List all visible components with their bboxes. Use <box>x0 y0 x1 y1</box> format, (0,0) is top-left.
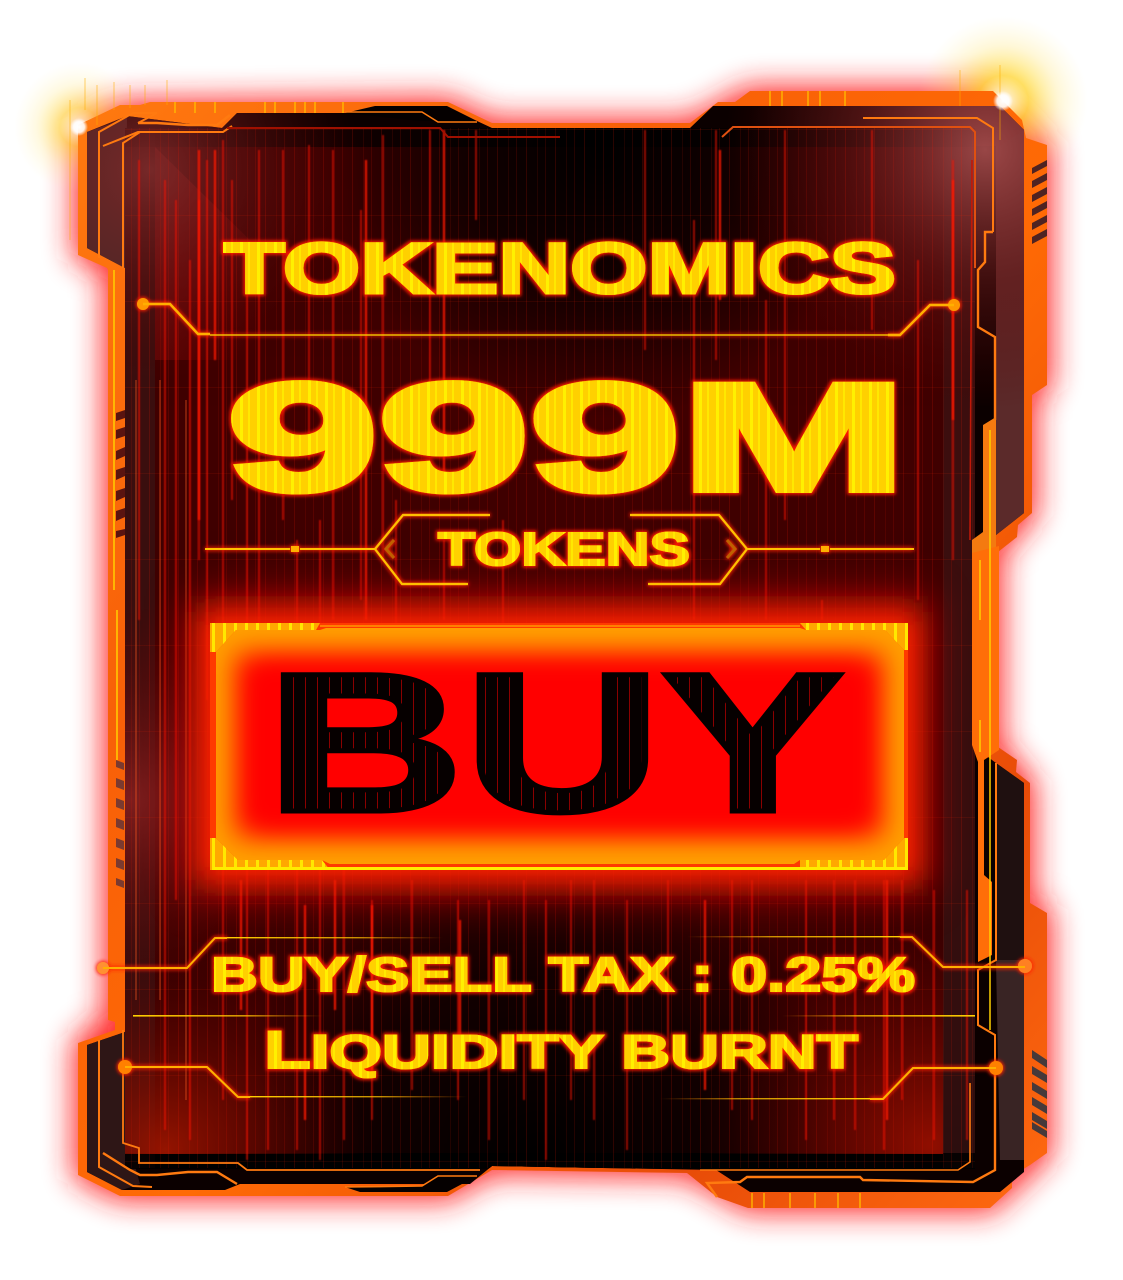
center panel <box>87 106 1024 1169</box>
center line <box>210 334 888 336</box>
left bottom line 1 <box>123 1030 480 1170</box>
corner light streaks <box>70 65 1000 240</box>
left bottom connector <box>125 1067 250 1097</box>
right bottom line 1 <box>700 1083 970 1170</box>
left node <box>291 546 299 552</box>
divider right <box>782 1015 975 1017</box>
inner red core <box>236 654 882 836</box>
left connector <box>143 304 210 334</box>
right bottom line 2 <box>707 1073 995 1197</box>
hud frame <box>78 91 1047 1208</box>
corner light top left <box>87 113 334 334</box>
panel background <box>125 128 975 1168</box>
right bottom dot <box>989 1061 1003 1075</box>
right orange strip upper <box>972 417 996 556</box>
chevron left <box>386 540 394 558</box>
left inner vertical <box>123 132 140 268</box>
corner glow: top right <box>918 16 1088 186</box>
outer red glow <box>78 91 1047 1208</box>
bottom notch line <box>345 1176 477 1187</box>
heading: tokenomics: TOKENOMICS <box>224 230 896 309</box>
right dot <box>948 299 960 311</box>
button stripe corners <box>210 623 908 870</box>
top notch <box>345 106 477 121</box>
button bottom line <box>214 867 906 870</box>
button glow <box>200 612 918 880</box>
left tax connector <box>103 938 227 968</box>
bright red lines <box>199 130 953 1120</box>
left top outer line <box>99 113 157 258</box>
tokens label: TOKENS <box>438 523 690 575</box>
right lower bracket <box>978 763 996 1075</box>
right tax connector <box>900 937 1025 967</box>
left tax dot <box>97 962 109 974</box>
bottom fading line right <box>660 1098 870 1099</box>
top band <box>125 128 975 147</box>
total supply figure: 999M <box>227 352 907 523</box>
bottom-center dark <box>275 893 804 1168</box>
panel left shading <box>125 283 155 1153</box>
hex right <box>630 515 747 584</box>
buy button <box>210 623 908 870</box>
tax fading line left <box>227 937 443 938</box>
button wide glow <box>190 596 928 896</box>
button word: BUY <box>266 632 844 853</box>
top left triangle <box>155 147 260 360</box>
left top second line <box>103 126 232 146</box>
strip highlight lines <box>114 270 990 1030</box>
solid red core <box>256 668 862 824</box>
side light left <box>125 639 238 962</box>
tokens badge <box>205 515 914 584</box>
left rail <box>205 548 375 550</box>
vent: left lower <box>116 760 124 888</box>
button body with inner glow <box>210 623 908 870</box>
frame silhouette <box>78 91 1047 1208</box>
tax text: BUY/SELL TAX : 0.25% <box>211 949 915 1002</box>
right tax dot <box>1018 959 1032 973</box>
top-center dark <box>358 128 825 388</box>
top band yellow streaks <box>175 91 860 1208</box>
left bottom block tint <box>87 1032 140 1190</box>
warm left lines <box>136 380 186 1100</box>
frame dark interior <box>87 106 1024 1192</box>
right bracket <box>978 232 995 420</box>
top right second line <box>722 127 975 268</box>
inner plate <box>155 147 943 1153</box>
top dark red lines <box>227 128 560 137</box>
right node <box>821 546 829 552</box>
corner light bottom left <box>125 983 348 1154</box>
hex left <box>375 515 490 584</box>
bottom notch <box>345 1176 477 1192</box>
button base <box>210 623 908 870</box>
star: top right <box>993 91 1013 111</box>
right top band tint <box>750 106 1024 146</box>
right connector <box>888 305 954 335</box>
right lower block tint <box>996 763 1024 960</box>
left dot <box>137 298 149 310</box>
left bottom dot <box>118 1060 132 1074</box>
corner glow: top left <box>14 62 144 192</box>
tax fading line right <box>687 936 900 937</box>
bottom band <box>125 1153 975 1169</box>
button top line <box>320 625 800 627</box>
left bottom line 2 <box>103 1153 237 1184</box>
left top block tint <box>87 118 127 268</box>
inner amber edge <box>210 623 908 870</box>
right bottom connector <box>870 1068 996 1099</box>
top notch underline <box>345 112 477 122</box>
liquidity text: L IQUIDITY BURNT <box>264 1021 858 1080</box>
bottom fading line left <box>250 1096 467 1097</box>
left bottom line 3 <box>99 1040 152 1187</box>
right orange strip main <box>972 546 999 962</box>
divider left <box>133 1015 323 1017</box>
corner light top right <box>748 106 1024 386</box>
upper right band <box>970 160 972 540</box>
thin stripes <box>125 128 975 1168</box>
corner light bottom right <box>720 956 943 1154</box>
right top block tint <box>996 130 1024 535</box>
tax circuit <box>97 937 1032 974</box>
vent: right bottom <box>1032 1050 1047 1138</box>
bottom circuit <box>118 1060 1003 1099</box>
top right outer line <box>863 118 993 232</box>
left top track <box>138 115 230 125</box>
frame accent lines <box>99 112 996 1197</box>
right rail <box>747 548 914 550</box>
star: top left <box>70 118 88 136</box>
chevron right <box>727 540 735 558</box>
vent: left upper <box>116 410 125 538</box>
red vertical light lines <box>139 130 967 1160</box>
heading underline circuit <box>137 298 960 335</box>
vent: right top <box>1032 160 1047 244</box>
panel right shading <box>943 308 975 1153</box>
